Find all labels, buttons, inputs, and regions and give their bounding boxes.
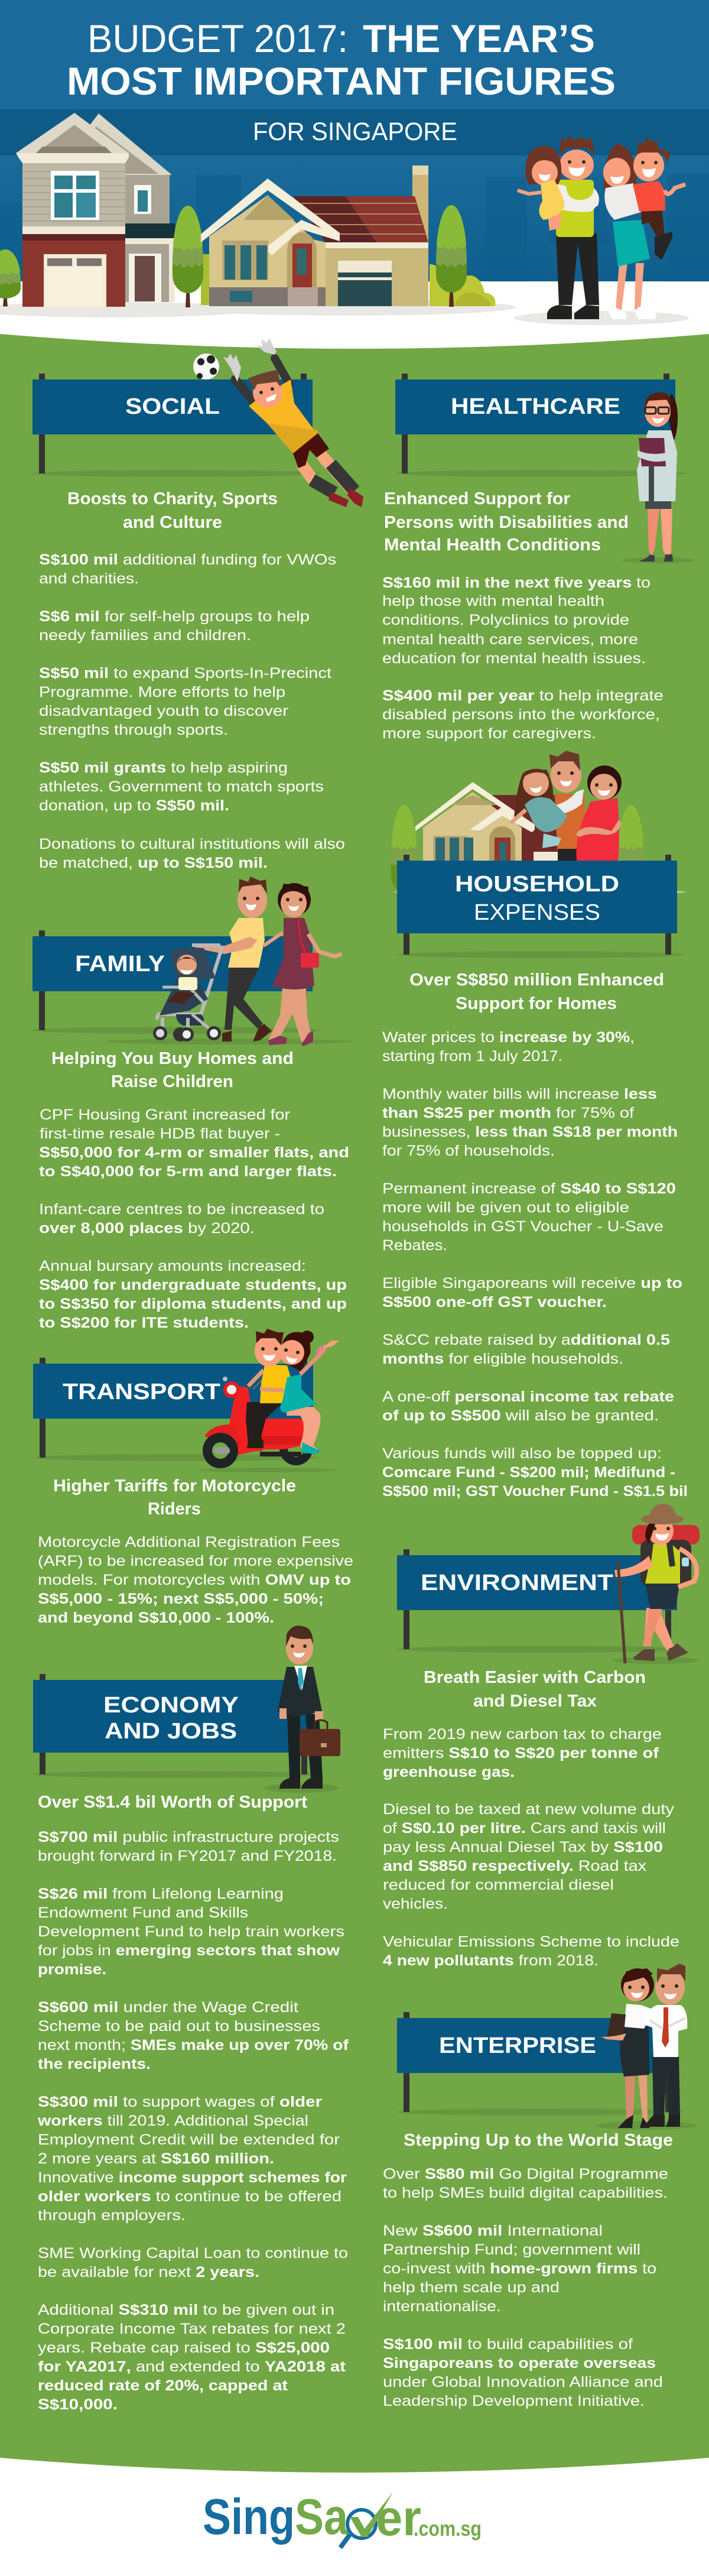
text: enterprise figures: to help SMEs build digital capabilities. — [383, 2185, 668, 2201]
woman — [279, 1331, 339, 1454]
sign: social — [31, 374, 321, 477]
text: economy figures: Innovative income support schemes for — [38, 2169, 347, 2186]
mother — [576, 765, 622, 861]
subheading: social: and Culture — [123, 513, 222, 532]
text: economy figures: Scheme to be paid out to businesses — [38, 2018, 320, 2035]
father — [539, 751, 585, 861]
text: healthcare figures: help those with mental health — [382, 593, 604, 609]
text: healthcare figures: S$400 mil per year to help integrate — [382, 687, 664, 704]
text: economy figures: S$600 mil under the Wage Credit — [38, 1999, 298, 2016]
text: environment figures: and S$850 respectively. Road tax — [383, 1858, 647, 1874]
text: social figures: S$100 mil additional funding for VWOs — [39, 551, 336, 568]
illustration: business couple — [596, 1964, 697, 2130]
text: economy figures: S$700 mil public infrastructure projects — [38, 1829, 339, 1845]
logo: SingSaver.com.sg: Sa — [295, 2489, 349, 2545]
sign: household expenses: EXPENSES — [474, 900, 600, 925]
text: household figures: of up to S$500 will also be granted. — [382, 1407, 659, 1424]
text: environment figures: reduced for commercial diesel — [383, 1877, 614, 1893]
bushes — [430, 264, 495, 306]
text: enterprise figures: internationalise. — [383, 2298, 501, 2315]
text: household figures: households in GST Voucher - U-Save — [382, 1218, 664, 1235]
text: transport figures — [38, 1534, 353, 1626]
text: economy figures: Corporate Income Tax rebates for next 2 — [38, 2321, 346, 2337]
father — [195, 877, 272, 1042]
subheading: transport: Riders — [148, 1500, 201, 1519]
text: environment figures: pay less Annual Diesel Tax by S$100 — [383, 1839, 663, 1855]
subheading: social — [67, 489, 278, 532]
subheading: family: Raise Children — [111, 1072, 233, 1091]
sign: social: SOCIAL — [125, 394, 220, 419]
sign: economy and jobs: ECONOMY — [103, 1693, 239, 1718]
illustration: family and house — [391, 751, 687, 907]
text: economy figures: S$300 mil to support wages of older — [38, 2094, 322, 2110]
title: MOST IMPORTANT FIGURES — [67, 59, 616, 103]
text: household figures: more will be given out to eligible — [382, 1199, 629, 1216]
text: household figures: Eligible Singaporeans will receive up to — [382, 1275, 682, 1292]
subheading: economy and jobs: Over S$1.4 bil Worth of Support — [38, 1793, 307, 1812]
text: economy figures: Development Fund to help train workers — [38, 1923, 344, 1940]
sign: household expenses — [396, 855, 685, 958]
illustration: couple on scooter — [199, 1329, 339, 1472]
text: family figures — [39, 1107, 349, 1331]
subheading: transport — [53, 1477, 296, 1519]
front house — [16, 113, 129, 307]
title: THE YEAR’S — [363, 17, 595, 60]
panel: economy and jobs — [32, 1626, 349, 2413]
text: economy figures: S$10,000. — [38, 2396, 118, 2413]
text: enterprise figures: help them scale up and — [383, 2279, 560, 2296]
text: enterprise figures: Over S$80 mil Go Digital Programme — [383, 2166, 668, 2182]
sign: family — [31, 930, 321, 1034]
text: social figures: and charities. — [39, 570, 139, 587]
panel: household expenses — [382, 751, 688, 1500]
title — [67, 17, 616, 103]
boy — [633, 137, 685, 260]
logo: SingSaver.com.sg — [203, 2489, 482, 2548]
text: economy figures: be available for next 2 years. — [38, 2264, 259, 2280]
sign: family: FAMILY — [75, 952, 165, 976]
subheading: social: Boosts to Charity, Sports — [67, 489, 278, 508]
text: social figures: S$6 mil for self-help groups to help — [39, 608, 310, 625]
subheading: household expenses — [409, 971, 664, 1013]
text: enterprise figures: Singaporeans to operate overseas — [383, 2355, 656, 2371]
panel: environment — [383, 1504, 700, 1969]
text: healthcare figures — [382, 575, 664, 742]
illustration: goalkeeper — [223, 338, 363, 507]
rear wheel — [279, 1432, 313, 1465]
subheading: enterprise: Stepping Up to the World Stage — [404, 2131, 673, 2150]
text: family figures: to S$200 for ITE students. — [39, 1315, 249, 1331]
text: economy figures: promise. — [38, 1961, 106, 1978]
text: social figures — [39, 551, 345, 871]
subheading: household expenses: Over S$850 million Enhanced — [409, 971, 664, 989]
illustration: doctor — [622, 392, 695, 563]
text: family figures: to S$40,000 for 5-rm and larger flats. — [39, 1163, 337, 1180]
text: environment figures: Diesel to be taxed at new volume duty — [383, 1801, 675, 1818]
subheading: healthcare: Persons with Disabilities and — [384, 513, 629, 532]
text: family figures: S$400 for undergraduate students, up — [39, 1277, 347, 1293]
text: healthcare figures: S$160 mil in the next five years to — [382, 575, 651, 591]
text: healthcare figures: mental health care services, more — [382, 631, 638, 648]
woman — [601, 1968, 654, 2128]
text: social figures: Donations to cultural institutions will also — [39, 836, 345, 852]
panel: social — [31, 338, 363, 871]
text: enterprise figures: under Global Innovation Alliance and — [383, 2374, 663, 2390]
logo: SingSaver.com.sg: Sing — [203, 2489, 295, 2545]
sign: healthcare: HEALTHCARE — [451, 394, 620, 419]
text: economy figures: Endowment Fund and Skills — [38, 1905, 248, 1921]
text: transport figures: S$5,000 - 15%; next S$5,000 - 50%; — [38, 1591, 324, 1607]
panel: family — [31, 877, 354, 1331]
text: economy figures: SME Working Capital Loan to continue to — [38, 2245, 348, 2262]
text: environment figures — [383, 1726, 679, 1969]
text: healthcare figures: conditions. Polyclinics to provide — [382, 612, 629, 628]
subtitle: for Singapore: FOR SINGAPORE — [253, 118, 457, 146]
text: household figures: Various funds will also be topped up: — [382, 1445, 662, 1462]
sign: environment — [396, 1549, 685, 1653]
text: economy figures — [37, 1829, 349, 2413]
subheading: environment: and Diesel Tax — [473, 1692, 597, 1711]
text: household figures: S$500 mil; GST Voucher Fund - S$1.5 bil — [382, 1483, 688, 1500]
text: healthcare figures: disabled persons into the workforce, — [382, 706, 660, 723]
text: household figures: Rebates. — [382, 1237, 447, 1254]
text: social figures: disadvantaged youth to discover — [39, 703, 288, 719]
illustration: parents with stroller — [105, 877, 354, 1046]
text: family figures: S$50,000 for 4-rm or smaller flats, and — [39, 1144, 349, 1161]
text: household figures: A one-off personal income tax rebate — [382, 1388, 674, 1405]
text: social figures: athletes. Government to match sports — [39, 778, 324, 795]
father — [547, 136, 599, 319]
text: economy figures: years. Rebate cap raised to S$25,000 — [38, 2340, 330, 2356]
text: family figures: to S$350 for diploma students, and up — [39, 1296, 347, 1312]
text: economy figures: reduced rate of 20%, capped at — [38, 2377, 288, 2394]
subheading: healthcare: Enhanced Support for — [384, 489, 570, 508]
text: economy figures: workers till 2019. Additional Special — [37, 2113, 308, 2129]
subheading: environment: Breath Easier with Carbon — [424, 1668, 646, 1687]
text: family figures: Annual bursary amounts increased: — [39, 1258, 306, 1274]
text: household figures: Water prices to increase by 30% , — [382, 1029, 635, 1046]
text: transport figures: models. For motorcycles with OMV up to — [38, 1572, 351, 1588]
text: economy figures: 2 more years at S$160 million. — [38, 2150, 274, 2167]
subheading: family — [51, 1049, 294, 1091]
title: BUDGET 2017: — [87, 17, 348, 60]
text: environment figures: emitters S$10 to S$20 per tonne of — [383, 1745, 659, 1761]
logo: SingSaver.com.sg: .com.sg — [414, 2516, 482, 2541]
text: social figures: donation, up to S$50 mil. — [39, 797, 229, 814]
text: household figures: for 75% of households. — [382, 1143, 555, 1159]
text: environment figures: 4 new pollutants from 2018. — [383, 1952, 599, 1969]
text: social figures: S$50 mil grants to help aspiring — [39, 760, 288, 776]
text: household figures: than S$25 per month for 75% of — [382, 1105, 634, 1121]
text: economy figures: for YA2017, and extended to YA2018 at — [38, 2358, 346, 2375]
text: household figures: Monthly water bills will increase less — [382, 1086, 657, 1102]
text: enterprise figures: New S$600 mil International — [383, 2223, 603, 2239]
text: transport figures: Motorcycle Additional Registration Fees — [38, 1534, 340, 1550]
panel: enterprise — [383, 1964, 697, 2409]
house — [415, 782, 591, 861]
man — [246, 1329, 291, 1448]
sign: economy and jobs — [32, 1674, 320, 1778]
text: household figures: starting from 1 July 2017. — [382, 1048, 562, 1065]
sign: transport: TRANSPORT — [63, 1380, 220, 1404]
text: economy figures: for jobs in emerging sectors that show — [38, 1942, 340, 1959]
text: environment figures: From 2019 new carbon tax to charge — [383, 1726, 662, 1743]
text: environment figures: of S$0.10 per litre. Cars and taxis will — [383, 1820, 666, 1837]
illustration: houses and trees — [0, 113, 516, 317]
text: social figures: strengths through sports. — [39, 722, 228, 738]
text: healthcare figures: more support for caregivers. — [382, 725, 596, 742]
text: enterprise figures: S$100 mil to build capabilities of — [383, 2336, 633, 2353]
subheading: transport: Higher Tariffs for Motorcycle — [53, 1477, 296, 1495]
text: family figures: first-time resale HDB flat buyer - — [40, 1125, 280, 1142]
text: transport figures: and beyond S$10,000 - 100%. — [38, 1610, 274, 1626]
subheading: healthcare — [384, 489, 629, 554]
text: environment figures: vehicles. — [383, 1896, 448, 1912]
icon: football — [193, 353, 219, 379]
sign: healthcare — [395, 374, 687, 477]
subheading: environment — [424, 1668, 646, 1711]
sign: transport — [32, 1358, 320, 1461]
mother — [264, 883, 342, 1046]
subheading: healthcare: Mental Health Conditions — [384, 536, 601, 554]
text: household figures — [382, 1029, 688, 1500]
text: household figures: S$500 one-off GST voucher. — [382, 1294, 607, 1310]
back gable — [77, 113, 175, 302]
scooter body — [229, 1386, 304, 1455]
text: enterprise figures — [383, 2166, 668, 2409]
subheading: household expenses: Support for Homes — [456, 994, 617, 1013]
text: enterprise figures: Partnership Fund; government will — [383, 2241, 640, 2258]
bungalow — [201, 166, 428, 306]
text: social figures: needy families and children. — [39, 627, 251, 644]
text: economy figures: Additional S$310 mil to be given out in — [38, 2302, 334, 2318]
text: economy figures: S$26 mil from Lifelong Learning — [38, 1886, 284, 1902]
text: family figures: Infant-care centres to be increased to — [39, 1201, 324, 1218]
text: family figures: CPF Housing Grant increased for — [40, 1107, 290, 1123]
text: household figures: S&CC rebate raised by a dditional 0.5 — [382, 1332, 670, 1348]
text: social figures: be matched, up to S$150 mil. — [39, 855, 268, 871]
mother — [603, 144, 656, 319]
girl — [511, 769, 567, 848]
text: household figures: months for eligible households. — [382, 1351, 623, 1367]
panel: transport — [32, 1329, 353, 1626]
text: economy figures: through employers. — [38, 2207, 186, 2224]
man — [644, 1964, 687, 2127]
text: household figures: Permanent increase of S$40 to S$120 — [382, 1180, 676, 1197]
sign: environment: ENVIRONMENT — [421, 1571, 613, 1595]
text: economy figures: brought forward in FY2017 and FY2018. — [38, 1848, 337, 1864]
text: environment figures: Vehicular Emissions Scheme to include — [383, 1933, 679, 1950]
front wheel — [203, 1433, 238, 1468]
text: transport figures: (ARF) to be increased for more expensive — [38, 1553, 353, 1569]
text: household figures: Comcare Fund - S$200 mil; Medifund - — [382, 1464, 675, 1481]
text: economy figures: the recipients. — [38, 2056, 151, 2072]
text: social figures: S$50 mil to expand Sports-In-Precinct — [39, 665, 331, 682]
illustration: family — [514, 136, 689, 325]
sign: enterprise: ENTERPRISE — [439, 2033, 596, 2058]
girl — [518, 146, 564, 231]
stroller — [153, 945, 222, 1042]
text: healthcare figures: education for mental health issues. — [382, 650, 646, 667]
text: enterprise figures: Leadership Development Initiative. — [383, 2393, 645, 2409]
text: family figures: over 8,000 places by 2020. — [39, 1220, 255, 1237]
logo: SingSaver.com.sg: er — [376, 2490, 421, 2546]
illustration: hiker — [612, 1504, 700, 1664]
sign: enterprise — [396, 2012, 685, 2116]
text: household figures: businesses, less than S$18 per month — [382, 1124, 678, 1140]
illustration: businessman — [264, 1626, 340, 1793]
sign: economy and jobs: AND JOBS — [105, 1719, 237, 1744]
text: environment figures: greenhouse gas. — [383, 1764, 515, 1780]
panel: healthcare — [382, 374, 695, 742]
subheading: family: Helping You Buy Homes and — [51, 1049, 294, 1068]
text: economy figures: Employment Credit will be extended for — [38, 2131, 340, 2148]
text: economy figures: older workers to continue to be offered — [38, 2188, 342, 2205]
text: economy figures: next month; SMEs make up over 70% of — [38, 2037, 349, 2053]
text: enterprise figures: co-invest with home-grown firms to — [383, 2260, 656, 2277]
sign: household expenses: HOUSEHOLD — [455, 872, 619, 897]
headlight — [223, 1381, 240, 1398]
header background — [0, 0, 709, 358]
text: social figures: Programme. More efforts to help — [39, 684, 285, 700]
